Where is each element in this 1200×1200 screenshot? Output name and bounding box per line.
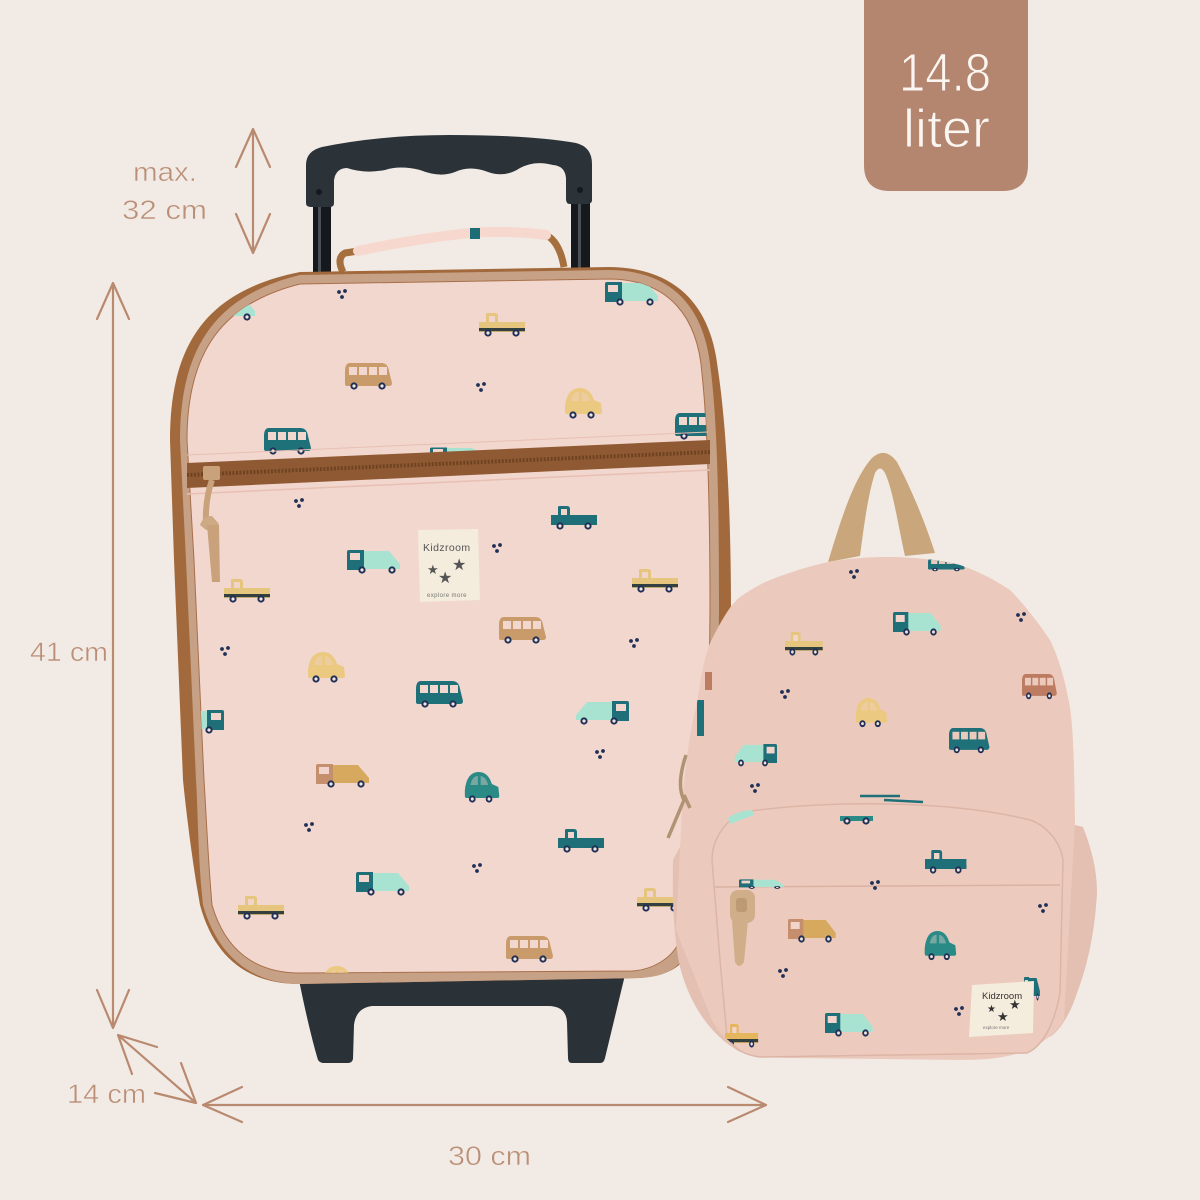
backpack brand label: Kidzroom: ★ — [1009, 997, 1021, 1012]
carry handle — [340, 228, 564, 272]
wheels and base — [299, 975, 625, 1063]
backpack brand label: Kidzroom: explore more — [983, 1025, 1010, 1030]
backpack zipper pull — [730, 890, 755, 966]
backpack brand label: Kidzroom: Kidzroom — [982, 991, 1022, 1002]
brand label: Kidzroom: ★ — [427, 562, 439, 577]
brand label: Kidzroom: ★ — [438, 570, 452, 587]
dimension: max 32 cm handle extension: max. — [133, 157, 197, 187]
badge text: 14.8 liter: liter — [903, 99, 990, 159]
backpack top handle — [828, 453, 935, 562]
brand label: Kidzroom: Kidzroom — [423, 542, 471, 554]
dimension: 30 cm width — [203, 1087, 766, 1171]
vehicle print on suitcase — [200, 282, 706, 973]
suitcase — [170, 267, 731, 997]
backpack side pocket right — [1040, 823, 1097, 1037]
dimension: 30 cm width: 30 cm — [448, 1141, 531, 1171]
backpack brand label: Kidzroom: ★ — [997, 1009, 1009, 1024]
dimension: 41 cm height — [30, 283, 129, 1028]
dimension: 41 cm height: 41 cm — [30, 637, 108, 667]
badge text: 14.8 liter: 14.8 — [899, 43, 991, 103]
dimension: 14 cm depth — [67, 1035, 196, 1109]
zipper pull — [200, 466, 220, 582]
suitcase shell — [170, 267, 731, 984]
telescopic handle — [306, 135, 592, 278]
front pocket zipper — [187, 440, 710, 488]
brand label: Kidzroom: ★ — [452, 557, 466, 574]
suitcase fabric — [187, 279, 710, 973]
brand label: Kidzroom: explore more — [427, 593, 467, 599]
volume badge — [864, 0, 1028, 191]
dimension: 14 cm depth: 14 cm — [67, 1079, 146, 1109]
backpack side zipper pull — [668, 755, 690, 838]
backpack front pocket — [712, 804, 1063, 1057]
brand label: Kidzroom — [418, 529, 480, 602]
vehicle print on backpack — [697, 558, 1057, 1048]
backpack main body — [676, 557, 1075, 1060]
dimension: max 32 cm handle extension — [122, 129, 270, 253]
backpack brand label: Kidzroom: ★ — [987, 1004, 996, 1015]
backpack brand label: Kidzroom — [969, 981, 1034, 1037]
suitcase piping — [180, 270, 719, 984]
dimension: max 32 cm handle extension: 32 cm — [122, 195, 207, 225]
backpack — [668, 453, 1097, 1060]
backpack side pocket left — [673, 820, 760, 1052]
